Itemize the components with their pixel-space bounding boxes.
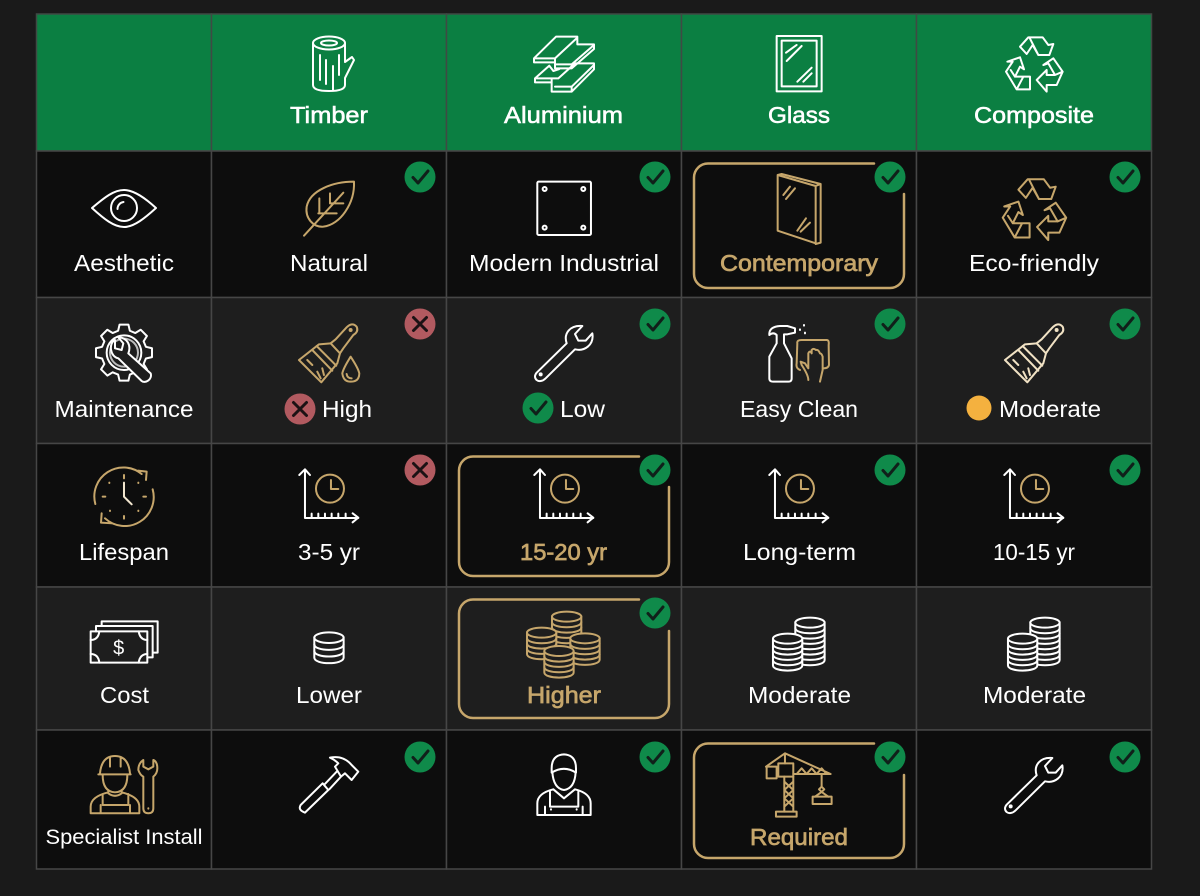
label: 10-15 yr: 10-15 yr: [993, 539, 1075, 565]
highlight frame: [694, 744, 904, 858]
cell: Timber 3-5 yr: [212, 444, 446, 587]
label: Lifespan: Lifespan: [79, 539, 169, 565]
label: 3-5 yr: 3-5 yr: [298, 539, 360, 565]
icon: wrench: [1005, 758, 1063, 813]
icon: brush: [1005, 324, 1063, 382]
cell: Glass Easy Clean: [682, 298, 916, 444]
label: Required: Required: [750, 824, 848, 850]
label: Eco-friendly: Eco-friendly: [969, 250, 1099, 276]
icon: coin stacks: [1008, 618, 1060, 671]
icon: clock cycle: [94, 467, 154, 526]
icon: time chart: [769, 469, 828, 522]
header: Timber: [212, 14, 446, 151]
header: Glass: [682, 14, 916, 151]
icon: aluminium profiles: [534, 37, 594, 92]
status: amber dot with Moderate: Moderate: [999, 396, 1101, 422]
label: Maintenance: Maintenance: [54, 396, 194, 422]
header: empty corner: [36, 14, 212, 151]
icon: recycle: [1003, 179, 1066, 240]
header: Aluminium: [446, 14, 682, 151]
badge: check: [1110, 308, 1140, 340]
label: Glass: Glass: [768, 102, 830, 128]
status: cross with High: [284, 394, 372, 424]
label: Aluminium: Aluminium: [504, 102, 623, 128]
icon: hammer: [300, 757, 358, 813]
badge: check: [874, 308, 906, 340]
row: Aesthetic: [36, 151, 1152, 298]
icon: recycle: [1006, 37, 1063, 92]
badge: check: [1110, 162, 1140, 192]
row: Cost: [36, 587, 1152, 730]
icon: installer: [537, 754, 591, 815]
cell: Specialist Install label: [36, 730, 212, 869]
icon: gear and wrench: [96, 325, 152, 382]
cell: Timber Natural: [212, 151, 446, 298]
label: 15-20 yr: 15-20 yr: [520, 539, 607, 565]
cell: Cost label: [36, 587, 212, 730]
badge: check: [874, 162, 906, 192]
icon: banknotes: [91, 621, 158, 663]
icon: time chart: [1004, 469, 1063, 522]
icon: glass pane: [778, 174, 821, 244]
cell: Aesthetic label: [36, 151, 212, 298]
icon: brush and drop: [299, 324, 359, 382]
row: Specialist Install: [36, 730, 1152, 869]
highlight frame: [694, 164, 904, 288]
cell: Aluminium Low: [446, 298, 682, 444]
cell: Glass Moderate: [682, 587, 916, 730]
label: Moderate: Moderate: [748, 682, 851, 708]
cell: Glass Required: [682, 730, 916, 869]
badge: check: [640, 598, 670, 628]
label: Lower: Lower: [296, 682, 362, 708]
badge: check: [640, 742, 670, 772]
badge: check: [404, 742, 436, 772]
icon: wrench: [535, 326, 593, 381]
label: Timber: Timber: [290, 102, 368, 128]
cell: Aluminium Higher: [446, 587, 682, 730]
cell: Aluminium Modern Industrial: [446, 151, 682, 298]
badge: check: [1110, 454, 1140, 486]
label: Moderate: Moderate: [983, 682, 1086, 708]
cell: Aluminium 15-20 yr: [446, 444, 682, 587]
badge: check: [874, 454, 906, 486]
label: Contemporary: Contemporary: [720, 250, 878, 276]
cell: Timber High: [212, 298, 446, 444]
icon: glass pane frame: [777, 36, 822, 91]
badge: cross: [404, 308, 436, 340]
highlight frame: [459, 600, 669, 718]
cell: Maintenance label: [36, 298, 212, 444]
status: check with Low: [522, 392, 606, 424]
cell: Composite 10-15 yr: [916, 444, 1152, 587]
cell: Composite Eco-friendly: [916, 151, 1152, 298]
cell: Glass Long-term: [682, 444, 916, 587]
cell: Composite wrench: [916, 730, 1152, 869]
highlight frame: [459, 456, 669, 576]
cell: Aluminium installer: [446, 730, 682, 869]
label: Easy Clean: Easy Clean: [740, 396, 858, 422]
icon: crane: [766, 753, 832, 817]
cell: Lifespan label: [36, 444, 212, 587]
badge: check: [404, 162, 436, 192]
badge: check: [640, 454, 670, 486]
label: Natural: Natural: [290, 250, 368, 276]
icon: eye: [92, 190, 156, 227]
row: Lifespan: [36, 444, 1152, 587]
header row: [36, 14, 1152, 151]
cell: Glass Contemporary: [682, 151, 916, 298]
badge: check: [640, 162, 670, 192]
cell: Timber Lower: [212, 587, 446, 730]
badge: cross: [404, 454, 436, 486]
icon: coin stacks: [773, 618, 825, 671]
cell: Composite Moderate: [916, 298, 1152, 444]
icon: leaf: [304, 182, 354, 236]
label: Composite: Composite: [974, 102, 1094, 128]
cell: Composite Moderate: [916, 587, 1152, 730]
label: Long-term: Long-term: [743, 539, 856, 565]
icon: coin stack: [314, 632, 344, 663]
icon: gold coin stacks: [527, 612, 600, 678]
header: Composite: [916, 14, 1152, 151]
icon: time chart: [299, 469, 358, 522]
label: Specialist Install: Specialist Install: [46, 826, 202, 849]
status: check with Low: Low: [560, 396, 606, 422]
label: Modern Industrial: Modern Industrial: [469, 250, 659, 276]
icon: metal plate: [537, 182, 591, 235]
label: Cost: Cost: [100, 682, 149, 708]
icon: spray bottle and cloth: [769, 325, 829, 382]
icon: log: [313, 36, 354, 91]
badge: check: [874, 742, 906, 772]
status: cross with High: High: [322, 396, 372, 422]
row: Maintenance: [36, 298, 1152, 444]
label: Higher: Higher: [527, 682, 601, 708]
icon: time chart: [534, 469, 593, 522]
cell: Timber hammer: [212, 730, 446, 869]
icon: banknotes: $: [113, 637, 124, 659]
icon: worker and wrench: [91, 756, 157, 813]
badge: check: [1110, 742, 1140, 772]
label: Aesthetic: Aesthetic: [74, 250, 174, 276]
badge: check: [640, 308, 670, 340]
